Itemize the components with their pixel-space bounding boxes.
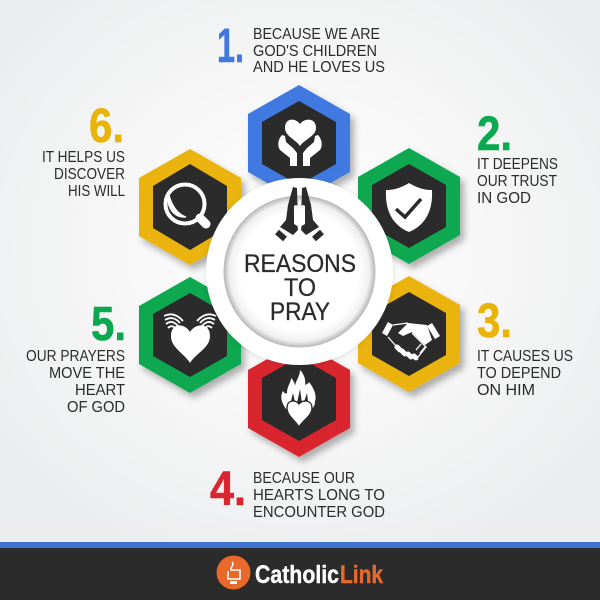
hexagon 5: green, heart with waves xyxy=(139,277,241,393)
reason 1: 1. xyxy=(217,20,244,73)
hexagon 1: blue, hands holding heart xyxy=(248,85,350,201)
icon: magnifying glass xyxy=(166,184,206,224)
icon: shield with check xyxy=(386,183,432,232)
reason 4: HEARTS LONG TO xyxy=(253,487,385,504)
reason 4: BECAUSE OUR xyxy=(253,470,355,487)
reason 1 xyxy=(217,20,385,76)
reason 6 xyxy=(42,100,125,200)
reason 2: IT DEEPENS xyxy=(477,156,558,173)
reason 6: DISCOVER xyxy=(54,166,125,183)
reason 5: HEART xyxy=(75,382,125,399)
reason 2 xyxy=(477,108,558,207)
hexagon 4: red, flaming heart xyxy=(248,341,350,457)
icon: heart with waves xyxy=(164,314,216,363)
reason 3 xyxy=(477,295,573,399)
hexagon 3: yellow, handshake xyxy=(358,276,460,392)
reason 2: IN GOD xyxy=(477,190,531,207)
logo wordmark: Link xyxy=(340,561,383,589)
title xyxy=(244,250,356,326)
hexagon 2: green, shield xyxy=(358,148,460,264)
reason 1: AND HE LOVES US xyxy=(253,59,385,76)
reason 5: MOVE THE xyxy=(49,365,125,382)
footer xyxy=(0,542,600,600)
reason 1: BECAUSE WE ARE xyxy=(253,26,380,43)
icon: flaming heart xyxy=(281,370,316,427)
reason 4: 4. xyxy=(210,463,246,516)
icon: logo xyxy=(216,556,250,590)
reason 2: OUR TRUST xyxy=(477,173,557,190)
icon: handshake xyxy=(382,322,440,358)
reason 4 xyxy=(210,463,385,521)
reason 5 xyxy=(26,298,126,416)
icon: praying hands xyxy=(277,187,322,239)
title: REASONS xyxy=(244,250,356,278)
reason 5: OUR PRAYERS xyxy=(26,348,125,365)
reason 3: IT CAUSES US xyxy=(477,348,573,365)
reason 1: GOD'S CHILDREN xyxy=(253,43,377,60)
title: PRAY xyxy=(270,298,330,326)
title: TO xyxy=(284,274,316,302)
reason 5: OF GOD xyxy=(67,399,125,416)
reason 5: 5. xyxy=(91,298,126,351)
reason 3: 3. xyxy=(477,295,512,348)
hexagon 6: yellow, magnifying glass xyxy=(139,149,241,265)
reason 6: IT HELPS US xyxy=(42,149,125,166)
reason 6: 6. xyxy=(89,100,124,153)
reason 3: ON HIM xyxy=(477,382,535,399)
reason 4: ENCOUNTER GOD xyxy=(253,504,385,521)
center circle xyxy=(206,178,393,365)
reason 3: TO DEPEND xyxy=(477,365,561,382)
reason 6: HIS WILL xyxy=(68,183,125,200)
reason 2: 2. xyxy=(477,108,512,161)
logo wordmark: Catholic xyxy=(255,561,339,589)
icon: hands holding heart xyxy=(278,120,322,166)
